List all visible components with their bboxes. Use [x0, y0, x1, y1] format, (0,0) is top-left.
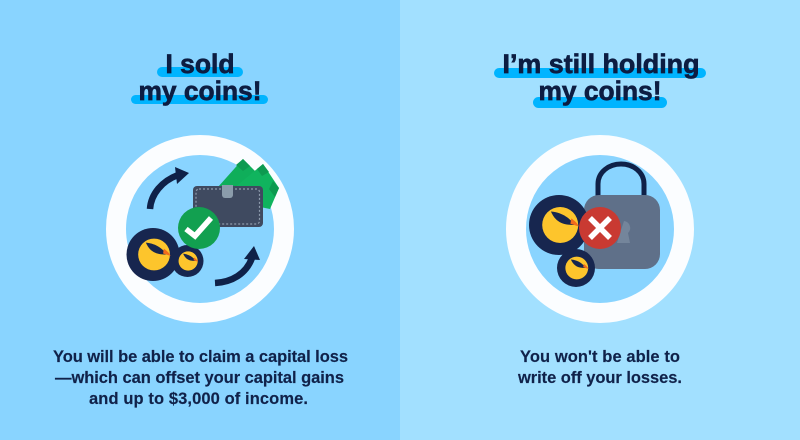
icon: small coin — [557, 249, 595, 287]
icon: large coin — [126, 228, 180, 281]
left panel background — [0, 0, 400, 440]
right panel background — [400, 0, 800, 440]
heading: I'm still holding my coins: I’m still holding — [502, 49, 700, 79]
text: sold outcome: and up to $3,000 of income. — [89, 390, 308, 408]
heading: I sold my coins — [131, 49, 268, 106]
icon: holding coins badge — [516, 145, 684, 313]
icon: padlock — [584, 164, 660, 269]
icon: arrow top — [150, 167, 189, 209]
heading: I sold my coins: I sold — [166, 49, 234, 79]
text: sold outcome: You will be able to claim a capital loss — [53, 348, 348, 366]
icon: cash — [218, 159, 279, 209]
icon: arrow bottom — [215, 246, 260, 283]
icon: wallet — [193, 185, 263, 227]
text: holding outcome: write off your losses. — [517, 369, 682, 387]
text: sold outcome — [53, 348, 348, 408]
icon: sold coins badge — [116, 145, 284, 313]
icon: cross mark — [579, 207, 621, 249]
text: holding outcome — [517, 348, 682, 387]
ring — [116, 145, 284, 313]
text: sold outcome: —which can offset your capital gains — [55, 369, 344, 387]
ring — [516, 145, 684, 313]
icon: large coin — [529, 195, 589, 255]
heading: I'm still holding my coins: my coins! — [538, 76, 662, 106]
heading: I'm still holding my coins — [494, 49, 706, 108]
text: holding outcome: You won't be able to — [520, 348, 680, 366]
heading: I sold my coins: my coins! — [138, 76, 262, 106]
icon: small coin — [172, 245, 204, 277]
icon: check mark — [178, 207, 220, 249]
